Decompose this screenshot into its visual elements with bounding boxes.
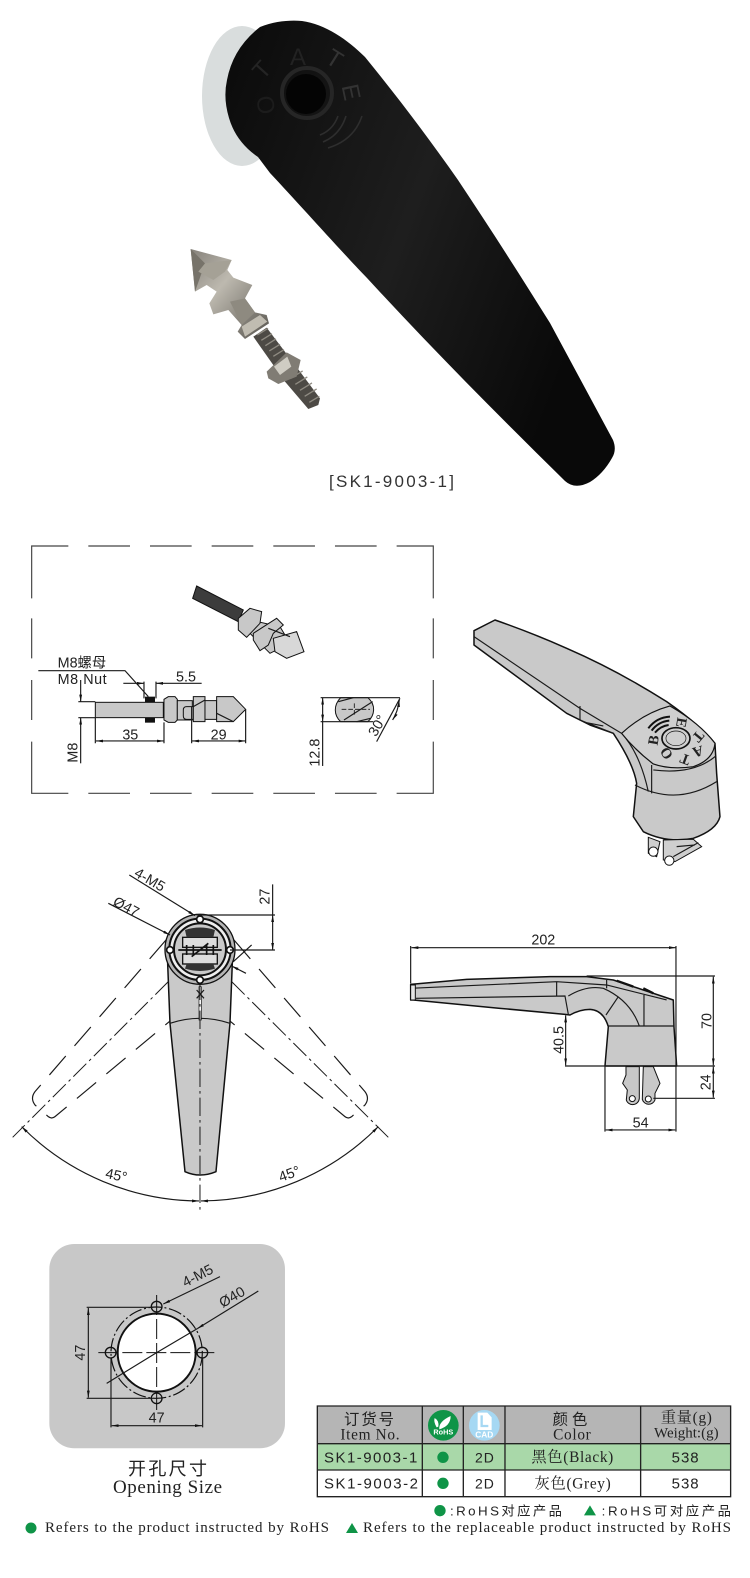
CAD badge: [469, 1410, 500, 1441]
handle body: [225, 21, 615, 486]
drawing: isometric handle: [474, 620, 720, 865]
emblem on handle: O: [252, 93, 281, 116]
top view dimensions: [108, 865, 275, 973]
row: SK1-9003-2: 2D: [475, 1476, 495, 1492]
product code label: [SK1-9003-1]: [329, 472, 454, 491]
handle edge lines: [474, 637, 717, 795]
opening circle and holes: [98, 1295, 215, 1410]
barbed head: [191, 249, 269, 339]
center line: [198, 982, 201, 1210]
emblem face: T: [678, 749, 693, 768]
dimensions: 5.5: [176, 670, 196, 686]
top view dimensions: Ø47: [110, 894, 142, 921]
opening dimensions: Ø40: [217, 1284, 248, 1311]
M8 nut label: [38, 654, 148, 697]
opening size caption: Opening Size: [113, 1477, 222, 1498]
latch feet: [648, 837, 702, 865]
dimensions: [65, 670, 246, 763]
row: SK1-9003-1: 黑色(Black): [531, 1449, 614, 1466]
row: SK1-9003-1: 2D: [475, 1449, 495, 1465]
side body: [411, 977, 677, 1066]
cam cross-section: 12.8: [307, 739, 323, 767]
product photo: metal screw: [191, 249, 320, 409]
opening dimensions: 47: [73, 1345, 89, 1361]
hex nut: [267, 352, 301, 384]
emblem on handle: A: [290, 44, 306, 71]
drawing: side view: [411, 932, 715, 1132]
dimensions: M8: [65, 743, 81, 763]
table fills: [317, 1406, 731, 1443]
header cells: [340, 1409, 719, 1444]
screw side view: [95, 697, 246, 723]
opening dimensions: 47: [149, 1411, 165, 1427]
threaded stem: [253, 328, 320, 409]
opening size caption: 开孔尺寸: [128, 1459, 207, 1479]
swing arc and angle labels: 45°: [104, 1166, 128, 1186]
table grid: [317, 1406, 731, 1497]
emblem face: E: [672, 716, 689, 729]
RoHS badge: RoHS: [433, 1428, 453, 1437]
isometric screw: [193, 586, 304, 658]
header cells: Item No.: [340, 1426, 400, 1443]
emblem face: A: [690, 742, 705, 760]
RoHS legend in English: [26, 1520, 731, 1536]
dimensions: 35: [122, 727, 138, 743]
opening dimensions: 4-M5: [180, 1262, 216, 1291]
row: SK1-9003-1: SK1-9003-1: [324, 1449, 417, 1466]
opening size caption: [113, 1459, 222, 1498]
drawing: screw dimensions in dashed frame: [32, 546, 433, 793]
header cells: Weight:(g): [654, 1425, 719, 1441]
cam cross-section: 30°: [366, 713, 390, 739]
swing arc and angle labels: [22, 1127, 378, 1201]
side view dimensions: 54: [633, 1115, 649, 1131]
opening dimensions: [73, 1262, 258, 1427]
RoHS legend in English: Refers to the replaceable product instructed by RoHS: [363, 1520, 731, 1536]
ghost handle positions: [13, 940, 388, 1137]
M8 nut label: M8 Nut: [58, 672, 107, 688]
header cells: 重量(g): [661, 1409, 713, 1426]
handle body: [168, 963, 232, 1175]
emblem on handle: T: [247, 56, 278, 85]
row: SK1-9003-2: 538: [672, 1476, 700, 1493]
swing arc and angle labels: 45°: [277, 1163, 303, 1186]
emblem face: O: [657, 744, 677, 762]
RoHS legend in Chinese: [434, 1504, 731, 1519]
row: SK1-9003-1: 538: [672, 1449, 700, 1466]
emblem on handle: [247, 44, 365, 148]
emblem face: T: [688, 727, 707, 745]
spec table: [317, 1406, 731, 1519]
header cells: 订货号: [344, 1412, 396, 1429]
top view dimensions: 27: [258, 889, 274, 905]
mounting head: [165, 914, 235, 984]
emblem on handle: T: [321, 44, 348, 75]
side view dimensions: 40.5: [551, 1026, 567, 1054]
header cells: 颜色: [553, 1412, 591, 1429]
row: SK1-9003-2: 灰色(Grey): [535, 1475, 611, 1492]
grey base disc: [202, 26, 282, 166]
side view dimensions: [411, 932, 715, 1132]
side view dimensions: 70: [699, 1013, 715, 1029]
row: SK1-9003-2: [324, 1475, 700, 1493]
side body details: [411, 980, 674, 1026]
RoHS legend in English: Refers to the product instructed by RoHS: [45, 1520, 329, 1536]
top view dimensions: 4-M5: [131, 865, 168, 895]
RoHS badge: [428, 1410, 459, 1441]
emblem face: B: [646, 734, 663, 746]
side view dimensions: 24: [699, 1074, 715, 1090]
RoHS legend in Chinese: :RoHS对应产品: [450, 1504, 562, 1519]
CAD badge: CAD: [475, 1429, 493, 1439]
latch feet: [623, 1067, 660, 1105]
emblem face: [622, 706, 716, 771]
cam cross-section: [307, 698, 400, 767]
dimensions: 29: [211, 727, 227, 743]
header cells: Color: [553, 1427, 591, 1444]
dashed frame: [32, 546, 433, 793]
panel: opening size: [49, 1244, 285, 1448]
row: SK1-9003-2: SK1-9003-2: [324, 1476, 418, 1493]
emblem on handle: E: [336, 82, 365, 103]
handle outline: [474, 620, 720, 840]
product photo: black handle: [202, 21, 615, 486]
M8 nut label: M8螺母: [58, 654, 106, 671]
side view dimensions: 202: [531, 932, 555, 948]
row: SK1-9003-1: [324, 1449, 700, 1466]
drawing: top view with 45 degree swing: [13, 865, 388, 1210]
RoHS legend in Chinese: :RoHS可对应产品: [602, 1504, 731, 1519]
grey panel: [49, 1244, 285, 1448]
